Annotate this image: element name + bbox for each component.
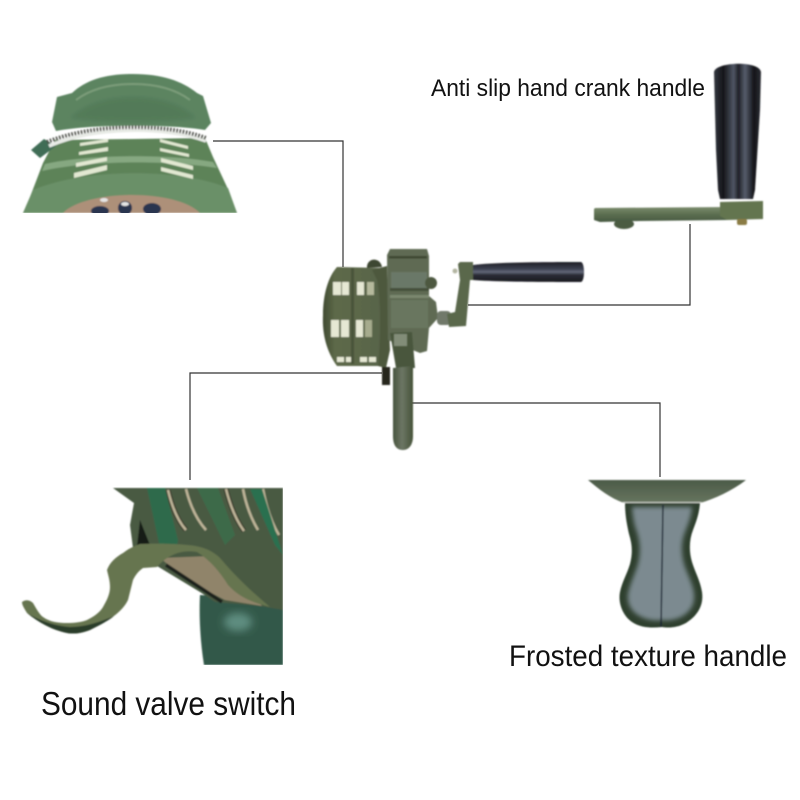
photo: crank handle with knob [594, 64, 763, 229]
curved base [588, 480, 746, 503]
housing [113, 488, 283, 610]
photo: sound valve switch [22, 488, 283, 665]
serrated band [31, 139, 56, 158]
crank arm [447, 262, 473, 327]
loop handle [393, 366, 413, 450]
crank arm [614, 219, 634, 229]
knob [714, 64, 761, 199]
collar [720, 201, 763, 220]
label: crank handle: Anti slip hand crank handle [431, 75, 705, 102]
green ribs [147, 488, 178, 544]
clamp ring [372, 266, 390, 368]
tan inner [160, 556, 262, 606]
grip face [628, 507, 694, 620]
photo: main siren [323, 249, 584, 450]
hook lever [22, 544, 270, 634]
bottom bracket [390, 332, 415, 368]
speaker holes [90, 200, 162, 213]
photo: siren top with serrated band [23, 74, 237, 216]
vent slots [74, 139, 193, 179]
rear drum [323, 267, 383, 366]
copper inner [63, 195, 200, 213]
shaft boss [437, 311, 451, 325]
label: sound valve switch: Sound valve switch [41, 685, 296, 722]
post [200, 595, 283, 665]
slots [331, 282, 376, 362]
dark recess [137, 520, 150, 546]
leader lines [190, 141, 690, 480]
black handle [473, 262, 584, 282]
top latch [367, 260, 382, 268]
drum body [30, 137, 228, 196]
vent slits [168, 489, 244, 531]
photo: frosted texture handle [588, 480, 746, 628]
center seam [661, 505, 663, 627]
grip outline [620, 503, 702, 628]
cap [52, 74, 211, 131]
central body [387, 249, 438, 353]
